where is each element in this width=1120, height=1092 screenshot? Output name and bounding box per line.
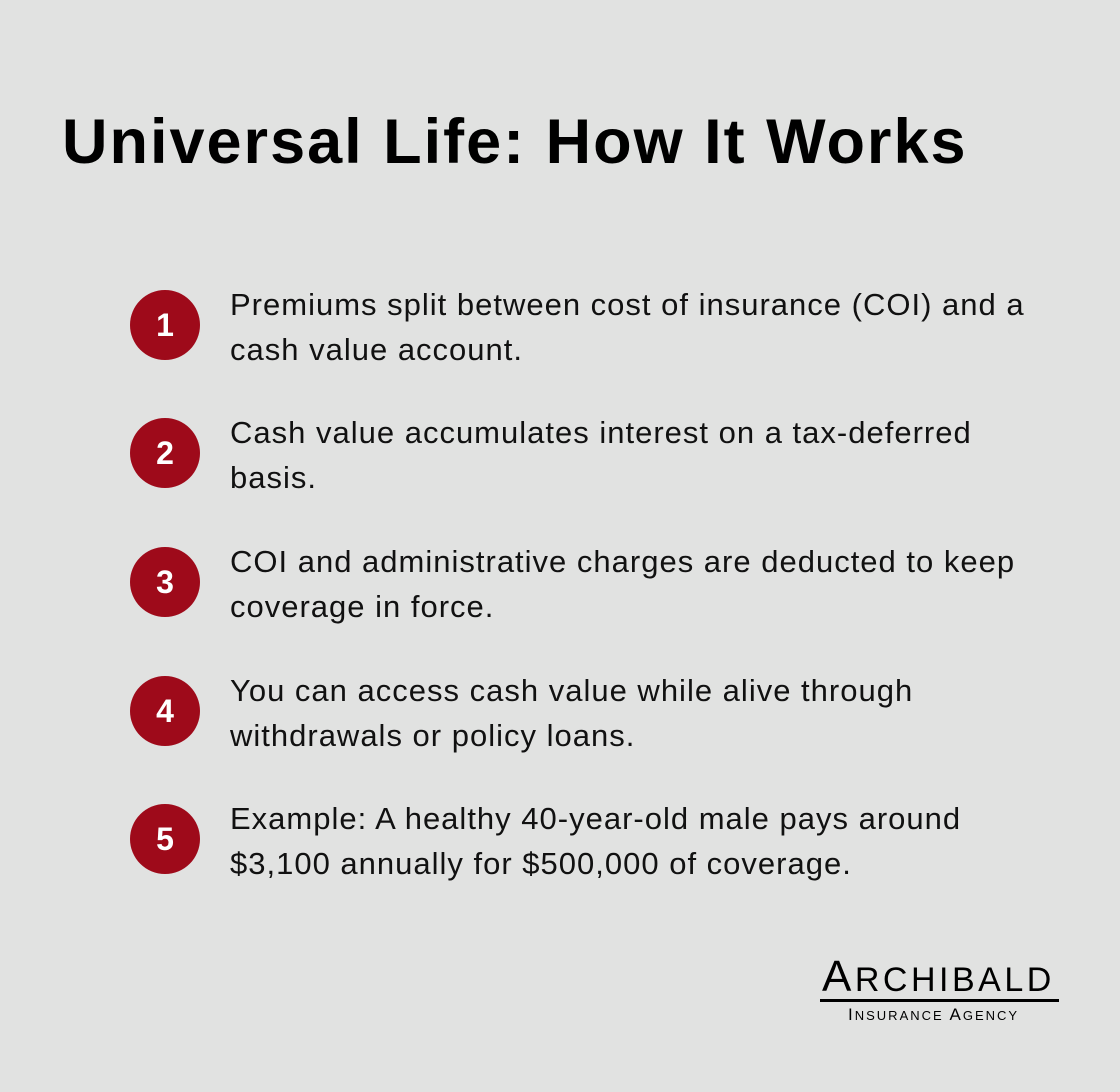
text 2: Cash value accumulates interest on a tax-deferred: [230, 415, 972, 450]
text 5: $3,100 annually for $500,000 of coverage.: [230, 846, 852, 881]
badge 4: 4: [156, 693, 174, 729]
logo: INSURANCE AGENCY: [848, 1005, 1019, 1024]
badge 2: [130, 418, 200, 488]
badge 1: [130, 290, 200, 360]
badge 3: [130, 547, 200, 617]
item 5: [130, 801, 961, 881]
logo: [820, 952, 1059, 1024]
item 2: [130, 415, 972, 495]
item 3: [130, 544, 1015, 624]
text 5: [230, 801, 961, 881]
badge 2: 2: [156, 435, 174, 471]
text 3: COI and administrative charges are deducted to keep: [230, 544, 1015, 579]
badge 5: 5: [156, 821, 174, 857]
text 3: coverage in force.: [230, 589, 494, 624]
badge 1: 1: [156, 307, 174, 343]
text 2: basis.: [230, 460, 317, 495]
item 4: [130, 673, 913, 753]
text 1: [230, 287, 1025, 367]
text 5: Example: A healthy 40-year-old male pays around: [230, 801, 961, 836]
badge 4: [130, 676, 200, 746]
text 4: You can access cash value while alive through: [230, 673, 913, 708]
logo: ARCHIBALD: [822, 952, 1055, 1001]
text 4: [230, 673, 913, 753]
text 4: withdrawals or policy loans.: [230, 718, 635, 753]
text 1: cash value account.: [230, 332, 523, 367]
text 3: [230, 544, 1015, 624]
text 2: [230, 415, 972, 495]
badge 5: [130, 804, 200, 874]
text 1: Premiums split between cost of insurance (COI) and a: [230, 287, 1025, 322]
title: Universal Life: How It Works: [62, 107, 968, 177]
item 1: [130, 287, 1025, 367]
badge 3: 3: [156, 564, 174, 600]
